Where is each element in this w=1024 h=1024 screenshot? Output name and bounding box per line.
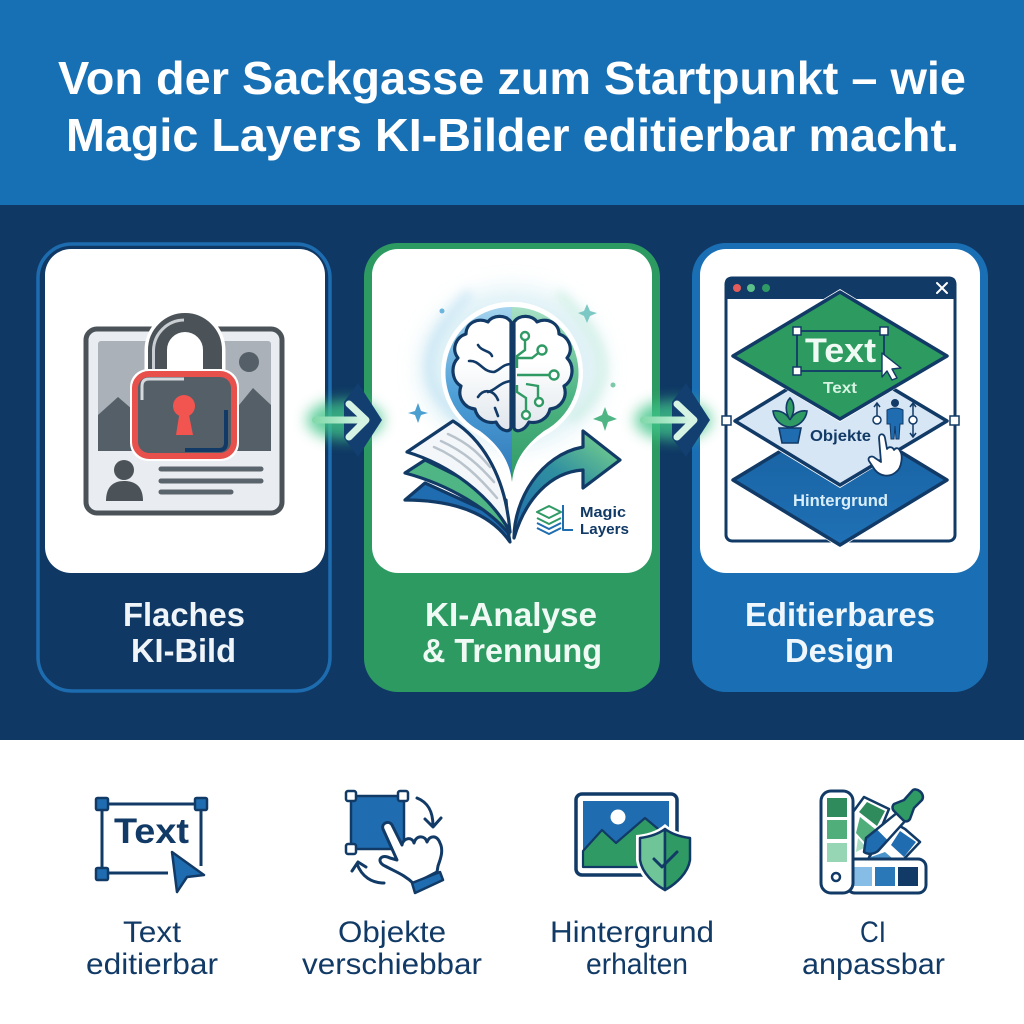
label: verschiebbar — [302, 948, 482, 981]
fan strips — [853, 797, 920, 860]
icon: text box with cursor — [96, 798, 207, 892]
label — [86, 916, 218, 981]
panel: KI-Analyse und Trennung — [364, 243, 660, 692]
layer: Hintergrund — [730, 412, 950, 548]
layer: Hintergrund: Hintergrund — [793, 492, 888, 510]
brain — [453, 316, 572, 431]
feature: Text editierbar — [86, 798, 218, 981]
label — [802, 916, 945, 981]
arrow: step 1 to step 2 — [307, 383, 383, 457]
label: erhalten — [586, 948, 688, 981]
feature: CI anpassbar — [802, 789, 945, 981]
label — [302, 916, 482, 981]
label: Text — [123, 916, 182, 949]
feature: Hintergrund erhalten — [550, 794, 714, 981]
icon: text box with cursor: Text — [114, 812, 189, 851]
logo: Magic Layers: Layers — [580, 521, 629, 538]
icon: colour palette and dropper — [821, 789, 926, 893]
icon: editable layers window — [722, 277, 959, 548]
label: Objekte — [338, 916, 446, 949]
label: Editierbares Design — [745, 596, 935, 669]
label: anpassbar — [802, 948, 945, 981]
book — [405, 483, 510, 542]
feature: Objekte verschiebbar — [302, 791, 482, 981]
label: Flaches KI-Bild: KI-Bild — [131, 632, 236, 669]
label: CI — [860, 916, 886, 949]
layer: Text — [730, 289, 950, 422]
panel: Editierbares Design — [692, 243, 988, 692]
icon: image with shield — [576, 794, 693, 894]
logo: Magic Layers — [537, 504, 629, 538]
label: Editierbares Design: Editierbares — [745, 596, 935, 633]
sparkles — [408, 403, 428, 423]
layer: Objekte — [730, 354, 950, 488]
dark process band — [0, 205, 1024, 740]
panel: Flaches KI-Bild — [38, 244, 330, 691]
label: Flaches KI-Bild: Flaches — [123, 596, 245, 633]
icon: locked flat image — [86, 320, 282, 513]
title — [58, 52, 966, 161]
label: Hintergrund — [550, 916, 714, 949]
arrow: step 2 to step 3 — [635, 383, 711, 457]
title: Von der Sackgasse zum Startpunkt – wie — [58, 52, 966, 104]
icon: movable object with hand — [346, 791, 443, 893]
label: KI-Analyse und Trennung: & Trennung — [422, 632, 602, 669]
layer: Objekte: Objekte — [810, 428, 871, 445]
title: Magic Layers KI-Bilder editierbar macht. — [66, 109, 959, 161]
layer: Text: Text — [823, 380, 858, 397]
header band — [0, 0, 1024, 205]
label: KI-Analyse und Trennung: KI-Analyse — [425, 596, 597, 633]
layer: Text: Text — [805, 332, 876, 370]
logo: Magic Layers: Magic — [580, 504, 626, 521]
icon: brain over open book — [405, 288, 629, 542]
label — [550, 916, 714, 981]
label: Flaches KI-Bild — [123, 596, 245, 669]
label: editierbar — [86, 948, 218, 981]
label: Editierbares Design: Design — [785, 632, 894, 669]
label: KI-Analyse und Trennung — [422, 596, 602, 669]
